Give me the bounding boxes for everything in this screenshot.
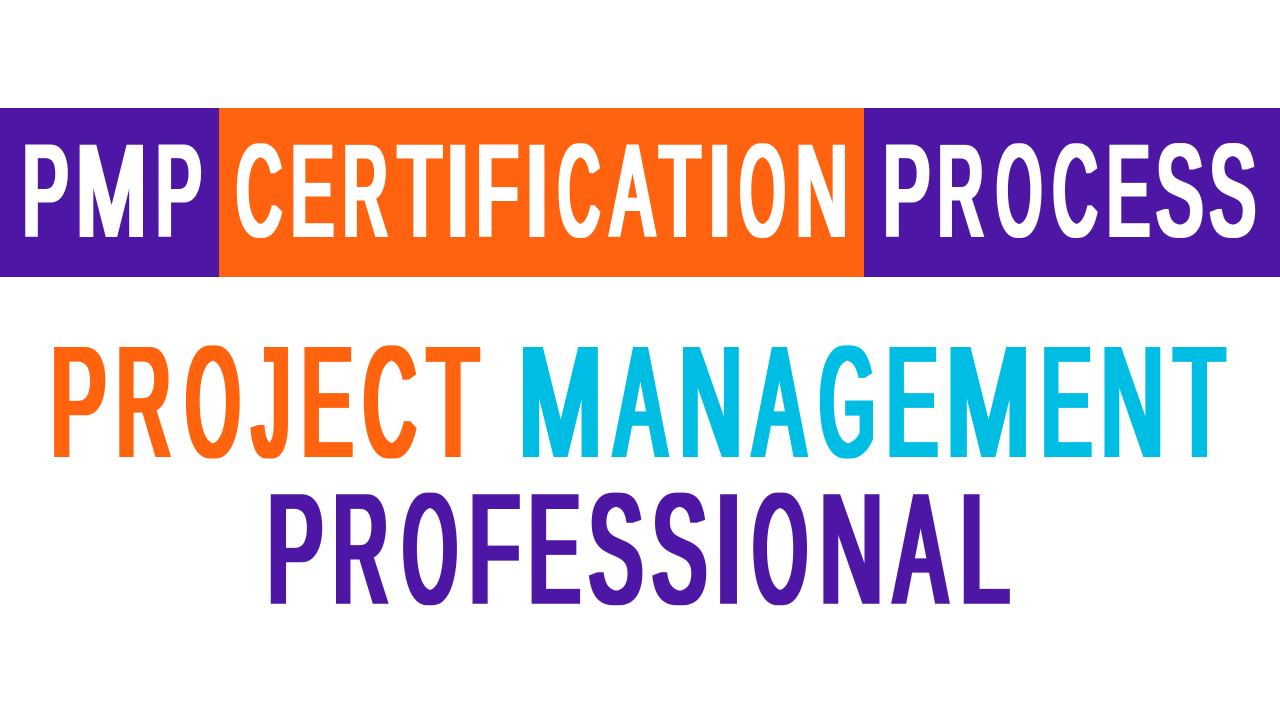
subtitle line two: PROFESSIONAL: F — [470, 463, 519, 635]
banner segment: PMP: M — [76, 119, 147, 262]
subtitle line two: PROFESSIONAL: R — [334, 463, 388, 635]
subtitle line one — [51, 315, 1224, 489]
subtitle line two: PROFESSIONAL: N — [820, 463, 883, 635]
subtitle line two: PROFESSIONAL: P — [268, 463, 323, 635]
subtitle line two: PROFESSIONAL: I — [715, 463, 742, 635]
banner segment: CERTIFICATION: T — [660, 119, 700, 262]
banner segment: CERTIFICATION: R — [343, 119, 387, 262]
word: PROJECT: J — [253, 315, 290, 489]
banner segment: PROCESS: C — [1053, 119, 1097, 262]
banner segment: CERTIFICATION: C — [558, 119, 599, 262]
banner segment: PROCESS: E — [1107, 119, 1149, 262]
banner segment: CERTIFICATION: I — [708, 119, 732, 262]
word: PROJECT: O — [186, 315, 239, 489]
banner segment: CERTIFICATION: C — [237, 119, 281, 262]
banner segment: PROCESS — [864, 108, 1280, 277]
title banner — [0, 108, 1280, 277]
banner segment: PROCESS: P — [884, 119, 930, 262]
banner segment: PROCESS: O — [997, 119, 1041, 262]
banner segment: PMP: P — [23, 119, 68, 262]
subtitle line two: PROFESSIONAL: O — [404, 463, 457, 635]
word: MANAGEMENT: M — [519, 315, 602, 489]
word: MANAGEMENT: E — [887, 315, 937, 489]
banner segment: CERTIFICATION: I — [525, 119, 549, 262]
title banner: N — [796, 119, 848, 262]
infographic canvas: A — [895, 463, 946, 635]
subtitle line one: T — [428, 315, 478, 489]
banner segment: PROCESS: R — [938, 119, 983, 262]
subtitle line two: PROFESSIONAL — [268, 463, 1009, 635]
word: MANAGEMENT: G — [820, 315, 875, 489]
banner segment: CERTIFICATION: T — [398, 119, 441, 262]
infographic canvas: L — [960, 463, 1009, 635]
word: PROJECT: R — [117, 315, 170, 489]
word: PROJECT: P — [51, 315, 106, 489]
banner segment: PMP — [0, 108, 219, 277]
word: PROJECT: E — [302, 315, 352, 489]
banner segment: CERTIFICATION: E — [291, 119, 333, 262]
title banner: P — [156, 119, 202, 262]
subtitle line one: C — [364, 315, 415, 489]
subtitle line two: PROFESSIONAL: S — [589, 463, 642, 635]
banner segment: CERTIFICATION: I — [446, 119, 470, 262]
word: MANAGEMENT: A — [754, 315, 805, 489]
word: MANAGEMENT: A — [615, 315, 666, 489]
banner segment: CERTIFICATION: F — [477, 119, 518, 262]
banner segment: CERTIFICATION — [219, 108, 864, 277]
subtitle line two: PROFESSIONAL: O — [754, 463, 807, 635]
subtitle line two: PROFESSIONAL: E — [529, 463, 580, 635]
word: MANAGEMENT: N — [680, 315, 742, 489]
subtitle line two: PROFESSIONAL: S — [653, 463, 706, 635]
banner segment: CERTIFICATION: A — [611, 119, 654, 262]
banner segment: CERTIFICATION: O — [740, 119, 785, 262]
